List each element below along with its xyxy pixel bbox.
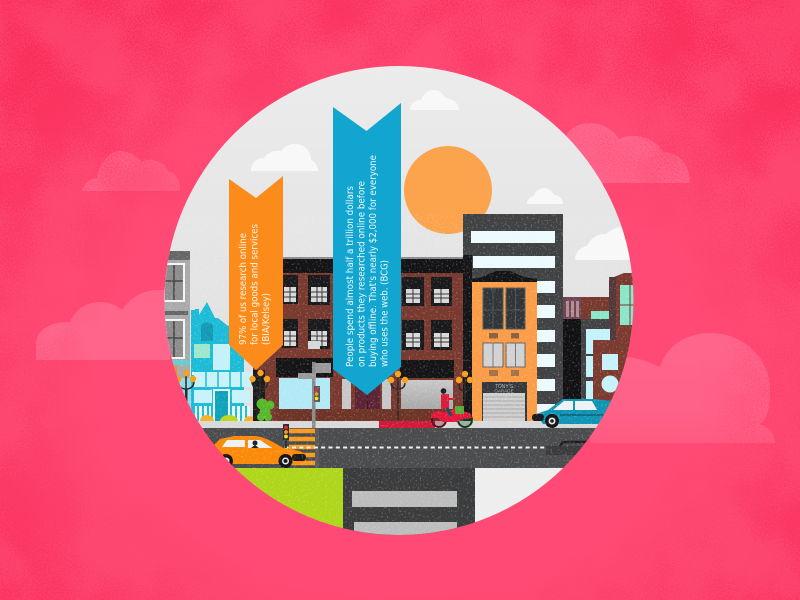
circular street scene (160, 60, 640, 538)
banner: blue statistic: buying offline. That's nearly $2,000 for everyone (368, 155, 379, 367)
banner: orange statistic: (BIA/Kelsey) (261, 293, 272, 345)
street lamps (175, 370, 473, 420)
banner: blue statistic: who uses the web. (BCG) (380, 260, 390, 367)
sidewalk (198, 421, 600, 428)
cloud: left of banners (251, 144, 318, 171)
cyclist with red bike (431, 388, 472, 427)
garage sign: TONY'S (495, 384, 514, 390)
speckle texture (165, 214, 635, 536)
cloud: upper right (565, 123, 690, 183)
cloud: middle left (36, 290, 170, 360)
sky (160, 60, 640, 430)
green bush (256, 398, 274, 421)
building: brick row (253, 257, 466, 422)
car: orange sedan (209, 436, 306, 468)
cloud: lower right (590, 333, 775, 443)
cloud: top (410, 90, 459, 110)
traffic lights and pole (283, 362, 331, 448)
banner: orange statistic (229, 176, 283, 370)
banner: orange statistic: 97% of us research online (238, 233, 249, 345)
banner: blue statistic (333, 103, 401, 395)
car: teal sedan (532, 399, 613, 428)
ground: lawn, pavement, white lot (235, 468, 563, 535)
building: dark tower (463, 214, 563, 426)
building: teal gabled house (191, 302, 256, 427)
building: orange Tony's Garage (472, 271, 537, 421)
banner: blue statistic: People spend almost half a trillion dollars (345, 186, 356, 367)
background clouds (36, 123, 775, 443)
buildings: right block (563, 273, 634, 425)
road (202, 428, 596, 468)
sun (404, 146, 492, 234)
banner: orange statistic: for local goods and services (250, 224, 260, 345)
cloud: by the sun (527, 188, 563, 204)
cloud: upper left (82, 151, 180, 191)
banner: blue statistic: on products they researched online before (356, 181, 368, 367)
garage sign second line: GARAGE (494, 388, 514, 394)
building: grey townhouse (164, 251, 192, 410)
sky clouds (251, 90, 630, 260)
cloud: right (575, 226, 630, 260)
